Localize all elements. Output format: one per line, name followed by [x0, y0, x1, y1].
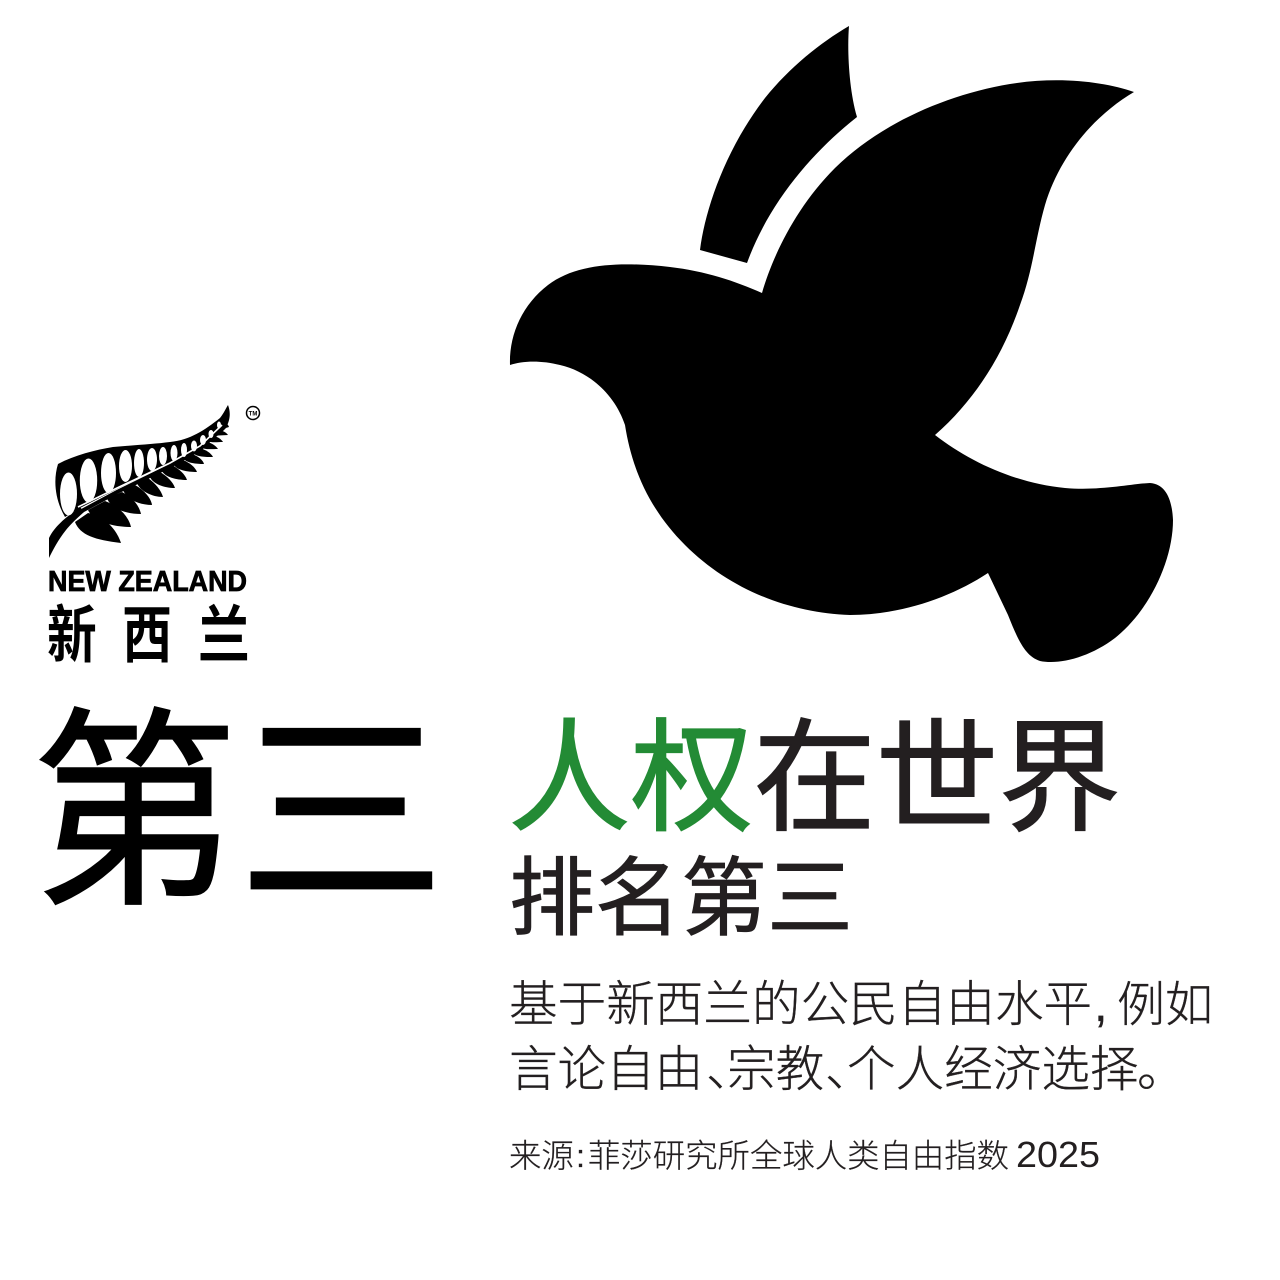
- source note: 2025: [1016, 1134, 1100, 1175]
- description text: ,: [1094, 978, 1108, 1032]
- description text: 例如: [1117, 979, 1213, 1032]
- logo: New Zealand fern mark: [47, 405, 260, 671]
- icon: trademark: [246, 406, 260, 420]
- large rank: 第三: 第三: [31, 694, 445, 933]
- icon: silver fern: [49, 405, 230, 558]
- logo text: 新西兰: 新: [47, 600, 97, 670]
- source note: :: [576, 1138, 585, 1174]
- description text: [509, 978, 1213, 1097]
- source note: 菲莎研究所全球人类自由指数: [588, 1138, 1009, 1174]
- logo text: NEW ZEALAND: NEW ZEALAND: [48, 566, 247, 598]
- description text: 宗教: [727, 1043, 824, 1097]
- source note: 来源: [509, 1138, 574, 1174]
- description text: 。: [1137, 1043, 1186, 1097]
- description text: 基于新西兰的公民自由水平: [509, 978, 1092, 1032]
- heading: 人权在世界: 人权在世界: [508, 710, 1121, 847]
- icon: trademark: TM: [249, 412, 257, 418]
- description text: 、: [706, 1043, 755, 1097]
- description text: 、: [825, 1043, 874, 1097]
- subheading: 排名第三: 排名第三: [509, 851, 853, 947]
- description text: 个人经济选择: [847, 1043, 1139, 1097]
- logo text: 新西兰: [47, 600, 250, 671]
- logo text: 新西兰: 西: [122, 600, 172, 670]
- description text: 言论自由: [509, 1043, 703, 1097]
- icon: dove: [510, 26, 1173, 662]
- logo text: 新西兰: 兰: [198, 601, 250, 671]
